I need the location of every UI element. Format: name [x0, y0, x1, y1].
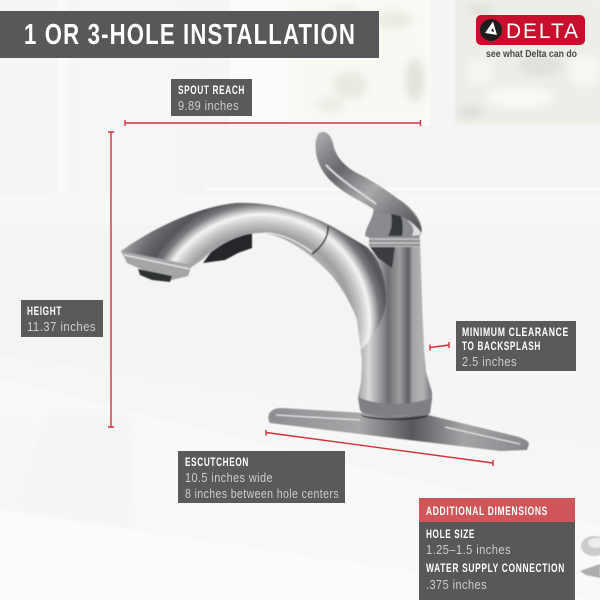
faucet: escutcheon plate [268, 408, 529, 451]
callout: minimum clearance [456, 321, 576, 371]
faucet: shadow under collar [370, 247, 395, 268]
faucet: curved spout and spray head [121, 203, 386, 350]
faucet: handle lever [316, 132, 421, 232]
faucet: collar [369, 238, 420, 247]
water supply connection [426, 563, 565, 592]
icon: Delta emblem [480, 19, 502, 41]
faucet: spout ring [312, 226, 328, 254]
hole size: HOLE SIZE [426, 529, 475, 541]
callout: height: HEIGHT [27, 306, 62, 318]
callout: spout reach [171, 79, 252, 116]
Delta logo [476, 15, 585, 60]
arrow: height dimension line [108, 132, 114, 427]
faucet: spray head face [121, 251, 192, 281]
callout: minimum clearance: TO BACKSPLASH [462, 341, 541, 353]
arrow: backsplash clearance line [430, 342, 449, 350]
panel header [419, 498, 575, 522]
faucet: body column [350, 240, 432, 416]
hole size: 1.25–1.5 inches [426, 543, 511, 557]
arrow: escutcheon dimension line [266, 430, 493, 466]
arrow: spout reach dimension line [125, 120, 420, 126]
callout: height: 11.37 inches [27, 320, 96, 334]
panel header: ADDITIONAL DIMENSIONS [426, 506, 548, 518]
faucet: hose underside [203, 232, 252, 263]
wordmark: DELTA [506, 20, 580, 43]
tagline: see what Delta can do [486, 49, 577, 60]
callout: escutcheon: ESCUTCHEON [185, 457, 249, 469]
callout: minimum clearance: 2.5 inches [462, 355, 517, 369]
faucet: base ring [358, 397, 432, 416]
hole size [426, 529, 511, 557]
callout: spout reach: SPOUT REACH [178, 85, 245, 97]
water supply connection: .375 inches [426, 578, 487, 592]
callout: escutcheon: 8 inches between hole centers [185, 487, 339, 501]
title text: 1 OR 3-HOLE INSTALLATION [24, 19, 356, 51]
faucet: handle hub [365, 200, 422, 238]
panel: additional dimensions [419, 498, 575, 600]
faucet: spray nozzle [138, 269, 172, 282]
callout: spout reach: 9.89 inches [178, 99, 239, 113]
callout: escutcheon: 10.5 inches wide [185, 471, 273, 485]
callout: height [21, 300, 103, 337]
title banner [0, 11, 379, 58]
blurred accessory at lower right [580, 536, 600, 578]
callout: escutcheon [178, 451, 345, 503]
faucet [121, 132, 529, 451]
